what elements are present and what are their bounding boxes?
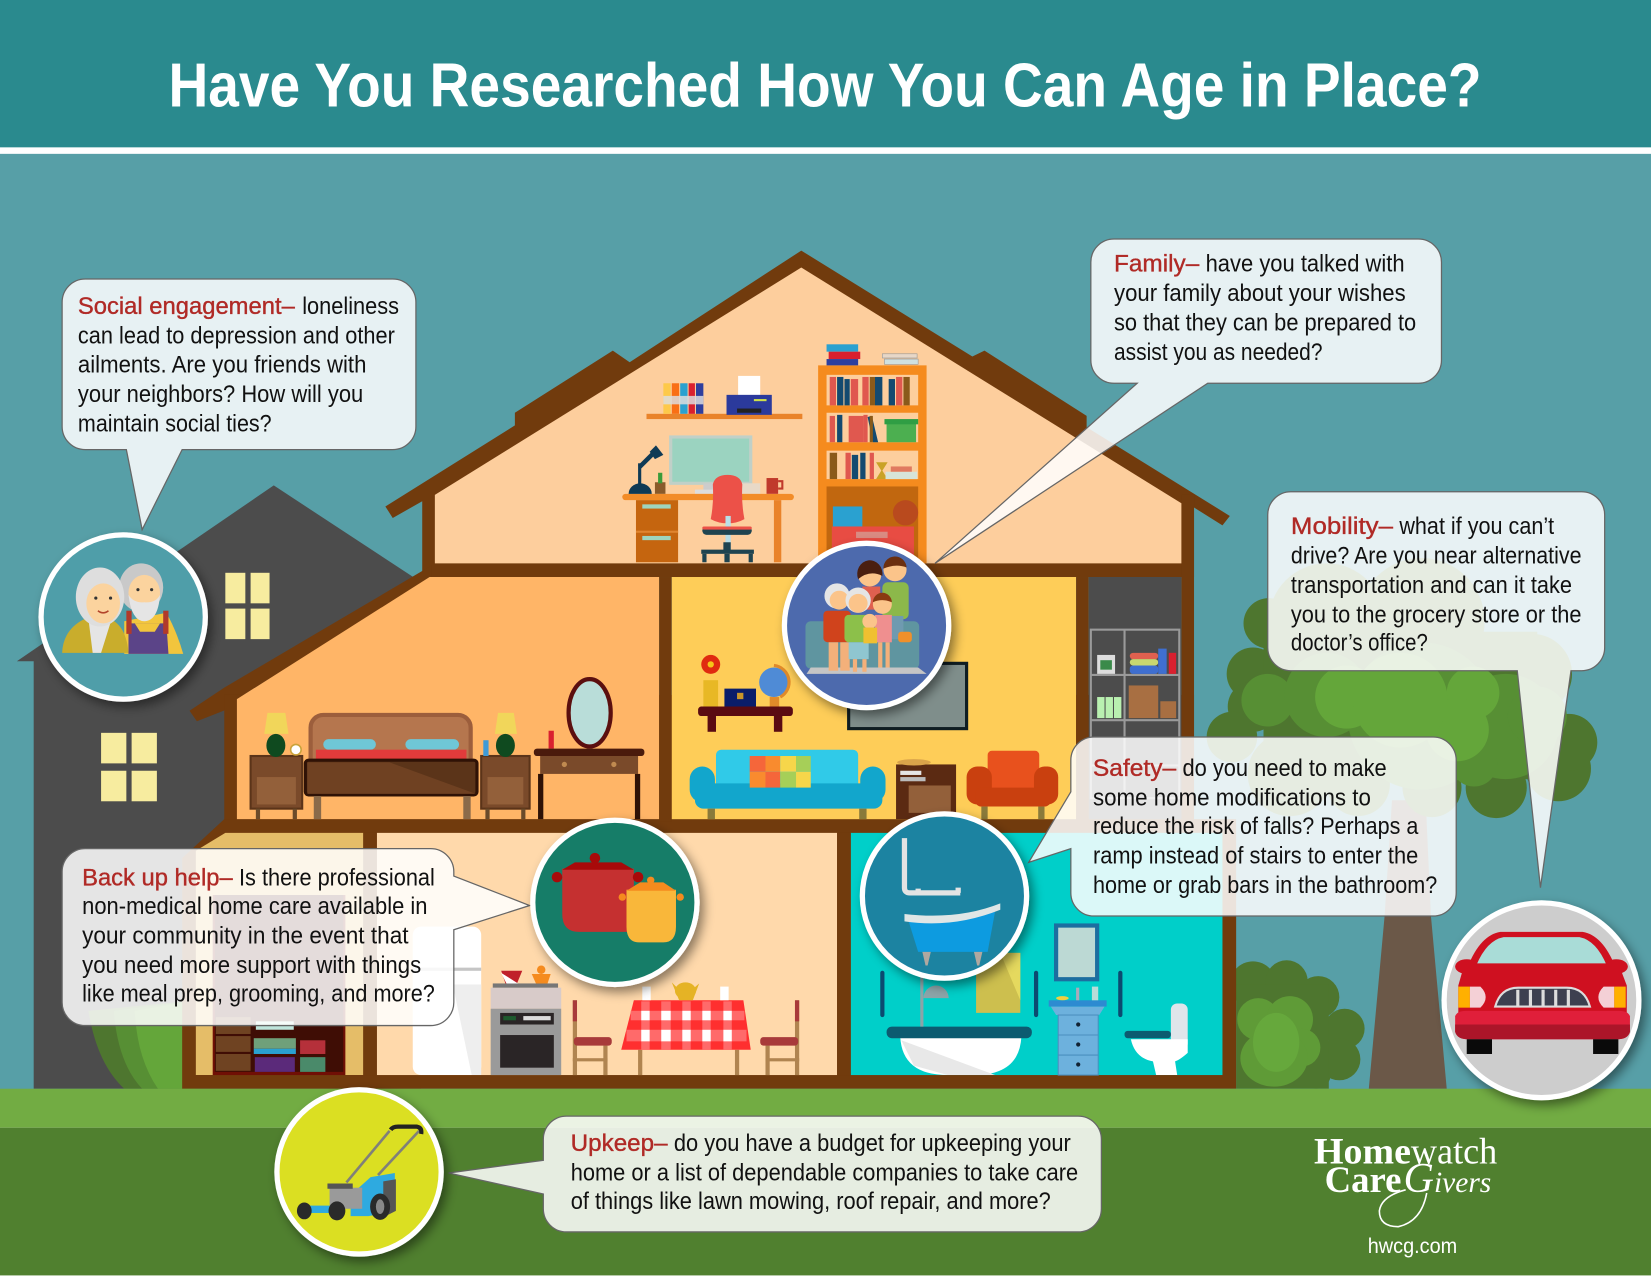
callout: back up help: your community in the event that <box>82 923 409 949</box>
callout: back up help <box>62 849 530 1026</box>
icon: bathtub with grab bar <box>862 814 1027 978</box>
callout: family: Family– <box>1114 252 1200 278</box>
callout: social engagement: maintain social ties? <box>78 412 272 438</box>
icon: family on sofa <box>784 543 949 708</box>
children <box>862 593 912 668</box>
wall shelf with binders <box>647 383 802 419</box>
blue sofa <box>690 750 886 819</box>
toilet <box>1125 1003 1188 1075</box>
tub <box>904 903 1000 966</box>
folded towels and bins <box>254 1021 325 1072</box>
callout: mobility: you to the grocery store or the <box>1291 602 1582 628</box>
callout: upkeep: Upkeep– <box>571 1131 668 1157</box>
desk lamp <box>629 445 663 494</box>
callout: safety: do you need to make <box>1182 756 1387 782</box>
stove with kettle and pot <box>491 966 561 1075</box>
upper window <box>225 573 270 639</box>
logo: Home <box>1314 1130 1411 1171</box>
towel <box>976 953 1020 1013</box>
small cabinet <box>896 759 956 819</box>
title: Have You Researched How You Can Age in Place? <box>168 51 1481 120</box>
computer desk <box>622 437 794 562</box>
left dining chair <box>573 1000 612 1075</box>
lower window <box>101 733 157 801</box>
callout: family: so that they can be prepared to <box>1114 311 1416 337</box>
callout: family: have you talked with <box>1206 252 1405 278</box>
car body <box>1458 963 1627 1021</box>
callout: mobility: Mobility– <box>1291 514 1394 540</box>
callout: upkeep <box>449 1116 1101 1232</box>
header banner <box>0 0 1651 154</box>
large tree <box>1207 558 1597 1089</box>
father <box>882 556 909 639</box>
headlights <box>1458 987 1626 1008</box>
callout: family: your family about your wishes <box>1114 281 1406 307</box>
callout: back up help: you need more support with things <box>82 953 421 979</box>
sky background <box>0 154 1651 1091</box>
grandfather <box>823 583 851 671</box>
kitchen <box>377 833 837 1075</box>
callout: social engagement <box>62 279 416 530</box>
armchair <box>967 751 1058 819</box>
stacked books on bookcase <box>827 344 918 365</box>
callout: social engagement: ailments. Are you friends with <box>78 353 366 379</box>
callout: upkeep: of things like lawn mowing, roof repair, and more? <box>571 1189 1051 1215</box>
callout: mobility: drive? Are you near alternative <box>1291 543 1582 569</box>
sink cabinet <box>1049 987 1107 1075</box>
grandfather <box>119 563 183 654</box>
callout: social engagement: your neighbors? How will you <box>78 382 363 408</box>
storage drawers <box>216 1017 251 1071</box>
right bush <box>1230 960 1365 1089</box>
storage closet <box>1076 577 1181 821</box>
tree canopy <box>1207 558 1597 818</box>
grandmother <box>62 568 128 653</box>
callout: safety: reduce the risk of falls? Perhaps a <box>1093 814 1419 840</box>
windshield <box>1468 932 1615 967</box>
icon: cooking pots <box>533 820 697 984</box>
callout: mobility <box>1268 492 1605 888</box>
left bush <box>88 1000 196 1089</box>
office chair <box>701 475 754 562</box>
callout: upkeep: do you have a budget for upkeeping your <box>674 1131 1071 1157</box>
bathroom <box>837 833 1222 1075</box>
icon: lawn mower <box>277 1090 441 1254</box>
logo: Care <box>1325 1159 1401 1200</box>
callout: back up help: like meal prep, grooming, and more? <box>82 981 435 1007</box>
wall television <box>849 663 967 729</box>
icon: red car <box>1444 903 1639 1098</box>
logo: hwcg.com <box>1368 1235 1457 1258</box>
callout: safety: ramp instead of stairs to enter the <box>1093 843 1418 869</box>
left nightstand and lamp <box>251 713 302 819</box>
grab bars <box>880 971 1122 1017</box>
ground <box>0 1089 1651 1275</box>
callout: social engagement: loneliness <box>302 294 399 320</box>
callout: mobility: transportation and can it take <box>1291 573 1572 599</box>
mother <box>857 560 882 610</box>
logo: Givers <box>1404 1155 1491 1202</box>
callout: back up help: Is there professional <box>239 866 435 892</box>
roof and walls <box>182 251 1236 1089</box>
callout: back up help: non-medical home care available in <box>82 894 427 920</box>
wheels <box>1467 1039 1618 1054</box>
callout: safety <box>1029 737 1456 916</box>
right dining chair <box>760 1000 799 1075</box>
red pot <box>552 853 643 932</box>
bed <box>305 715 477 819</box>
dining table <box>621 982 751 1075</box>
callout: mobility: doctor’s office? <box>1291 631 1428 657</box>
icon: elderly couple <box>41 535 205 699</box>
bathroom mirror <box>1056 926 1097 979</box>
callout: safety: some home modifications to <box>1093 785 1371 811</box>
mower handle <box>346 1131 419 1182</box>
right nightstand and lamp <box>481 713 530 819</box>
cutaway house <box>182 251 1236 1089</box>
bookcase <box>818 365 927 563</box>
mower wheels <box>297 1194 390 1220</box>
vanity with mirror <box>534 679 644 819</box>
cactus <box>655 473 665 494</box>
neighbouring dark house <box>17 485 421 1089</box>
callout: upkeep: home or a list of dependable companies to take care <box>571 1160 1078 1186</box>
mower deck <box>351 1173 395 1216</box>
bumper <box>1455 1011 1630 1039</box>
refrigerator <box>413 927 481 1075</box>
bathtub with shower <box>887 963 1032 1075</box>
attic office room <box>435 267 1181 563</box>
grandmother <box>844 588 872 672</box>
red mug <box>767 478 782 494</box>
grab bar <box>904 838 960 893</box>
bedroom <box>237 577 672 821</box>
printer <box>727 376 772 415</box>
living room <box>672 577 1076 819</box>
grille <box>1495 988 1590 1007</box>
callout: safety: Safety– <box>1093 756 1177 782</box>
laundry and storage room <box>196 833 377 1075</box>
mirrors <box>1455 959 1628 974</box>
side table with flower and globe <box>698 655 793 732</box>
logo <box>1314 1130 1497 1258</box>
yellow pot <box>619 877 684 942</box>
callout: family <box>935 239 1441 563</box>
sofa <box>805 621 927 674</box>
callout: back up help: Back up help– <box>82 866 234 892</box>
callout: family: assist you as needed? <box>1114 340 1322 366</box>
callout: mobility: what if you can’t <box>1398 514 1555 540</box>
callout: social engagement: can lead to depression and other <box>78 323 395 349</box>
logo: watch <box>1411 1130 1497 1171</box>
callout: social engagement: Social engagement– <box>78 294 296 320</box>
callout: safety: home or grab bars in the bathroom? <box>1093 873 1437 899</box>
